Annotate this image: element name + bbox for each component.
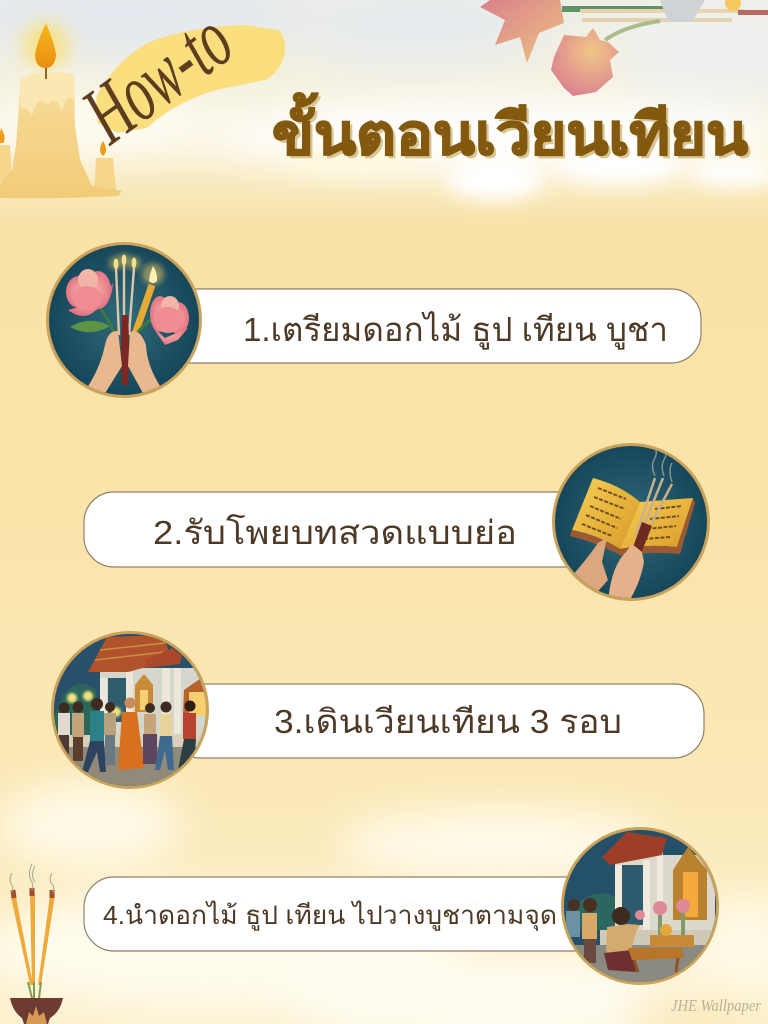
step 4 icon: woman kneeling at altar with offerings [561,827,719,985]
highlight brush behind How-to [96,25,285,133]
step 3 pill [170,684,704,758]
step 4 pill: 4.นำดอกไม้ ธูป เทียน ไปวางบูชาตามจุด [103,900,557,931]
illustration: lotus flowers top right [480,0,768,96]
step 4 pill [84,877,614,951]
step 2 pill: 2.รับโพยบทสวดแบบย่อ [153,514,517,551]
title: ขั้นตอนเวียนเทียน [272,93,748,167]
step 3 icon: monk leading candlelit procession around temple [50,630,210,792]
illustration: candles top left [0,21,122,198]
illustration: three incense sticks in a burner [10,864,63,1024]
step 1 pill [160,289,701,363]
step 2 icon: open prayer book and incense [552,443,710,606]
title: ขั้นตอนเวียนเทียน [275,96,751,170]
step 1 icon: hands holding lotus, incense and candle [46,242,202,398]
step 3 pill: 3.เดินเวียนเทียน 3 รอบ [274,703,622,740]
step 1 pill: 1.เตรียมดอกไม้ ธูป เทียน บูชา [243,311,668,350]
step 2 pill [84,492,614,567]
